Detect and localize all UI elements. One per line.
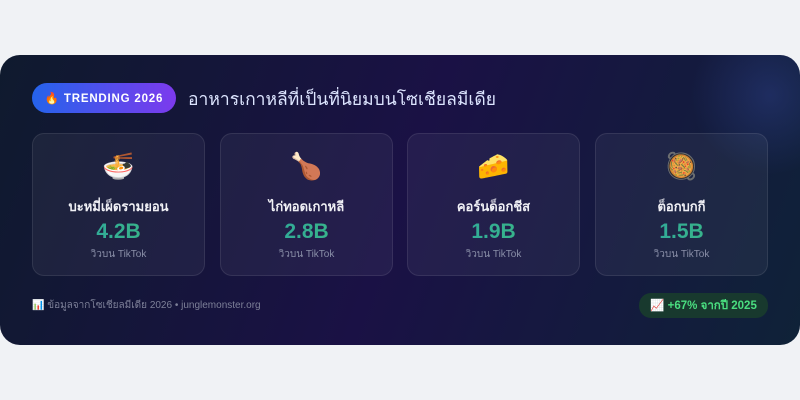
- card: ramyeon: วิวบน TikTok: [91, 249, 146, 260]
- card: tteokbokki: ต็อกบกกี: [657, 199, 706, 214]
- title: อาหารเกาหลีที่เป็นที่นิยมบนโซเชียลมีเดีย: [188, 89, 496, 109]
- card: ramyeon: 🍜: [102, 151, 135, 181]
- card: corn dog: [407, 133, 580, 276]
- card: fried chicken: 🍗: [290, 151, 323, 181]
- card: tteokbokki: 1.5B: [659, 220, 704, 243]
- card: ramyeon: บะหมี่เผ็ดรามยอน: [68, 199, 169, 214]
- growth pill: 📈 +67% จากปี 2025: [650, 300, 757, 312]
- card: fried chicken: วิวบน TikTok: [279, 249, 334, 260]
- card: fried chicken: ไก่ทอดเกาหลี: [269, 199, 344, 214]
- card: ramyeon: 4.2B: [96, 220, 141, 243]
- card: tteokbokki: วิวบน TikTok: [654, 249, 709, 260]
- card: ramyeon: [32, 133, 205, 276]
- card: corn dog: วิวบน TikTok: [466, 249, 521, 260]
- card: tteokbokki: 🥘: [665, 151, 698, 181]
- main panel: [0, 55, 800, 345]
- card: corn dog: 1.9B: [471, 220, 516, 243]
- card: corn dog: คอร์นด็อกชีส: [457, 199, 530, 214]
- card: tteokbokki: [595, 133, 768, 276]
- growth pill: [639, 293, 768, 318]
- card: corn dog: 🧀: [477, 151, 510, 181]
- card: fried chicken: [220, 133, 393, 276]
- badge: trending: 🔥 TRENDING 2026: [45, 93, 163, 105]
- card: fried chicken: 2.8B: [284, 220, 329, 243]
- badge: trending: [32, 83, 176, 113]
- footer source: 📊 ข้อมูลจากโซเชียลมีเดีย 2026 • junglemonster.org: [32, 300, 261, 311]
